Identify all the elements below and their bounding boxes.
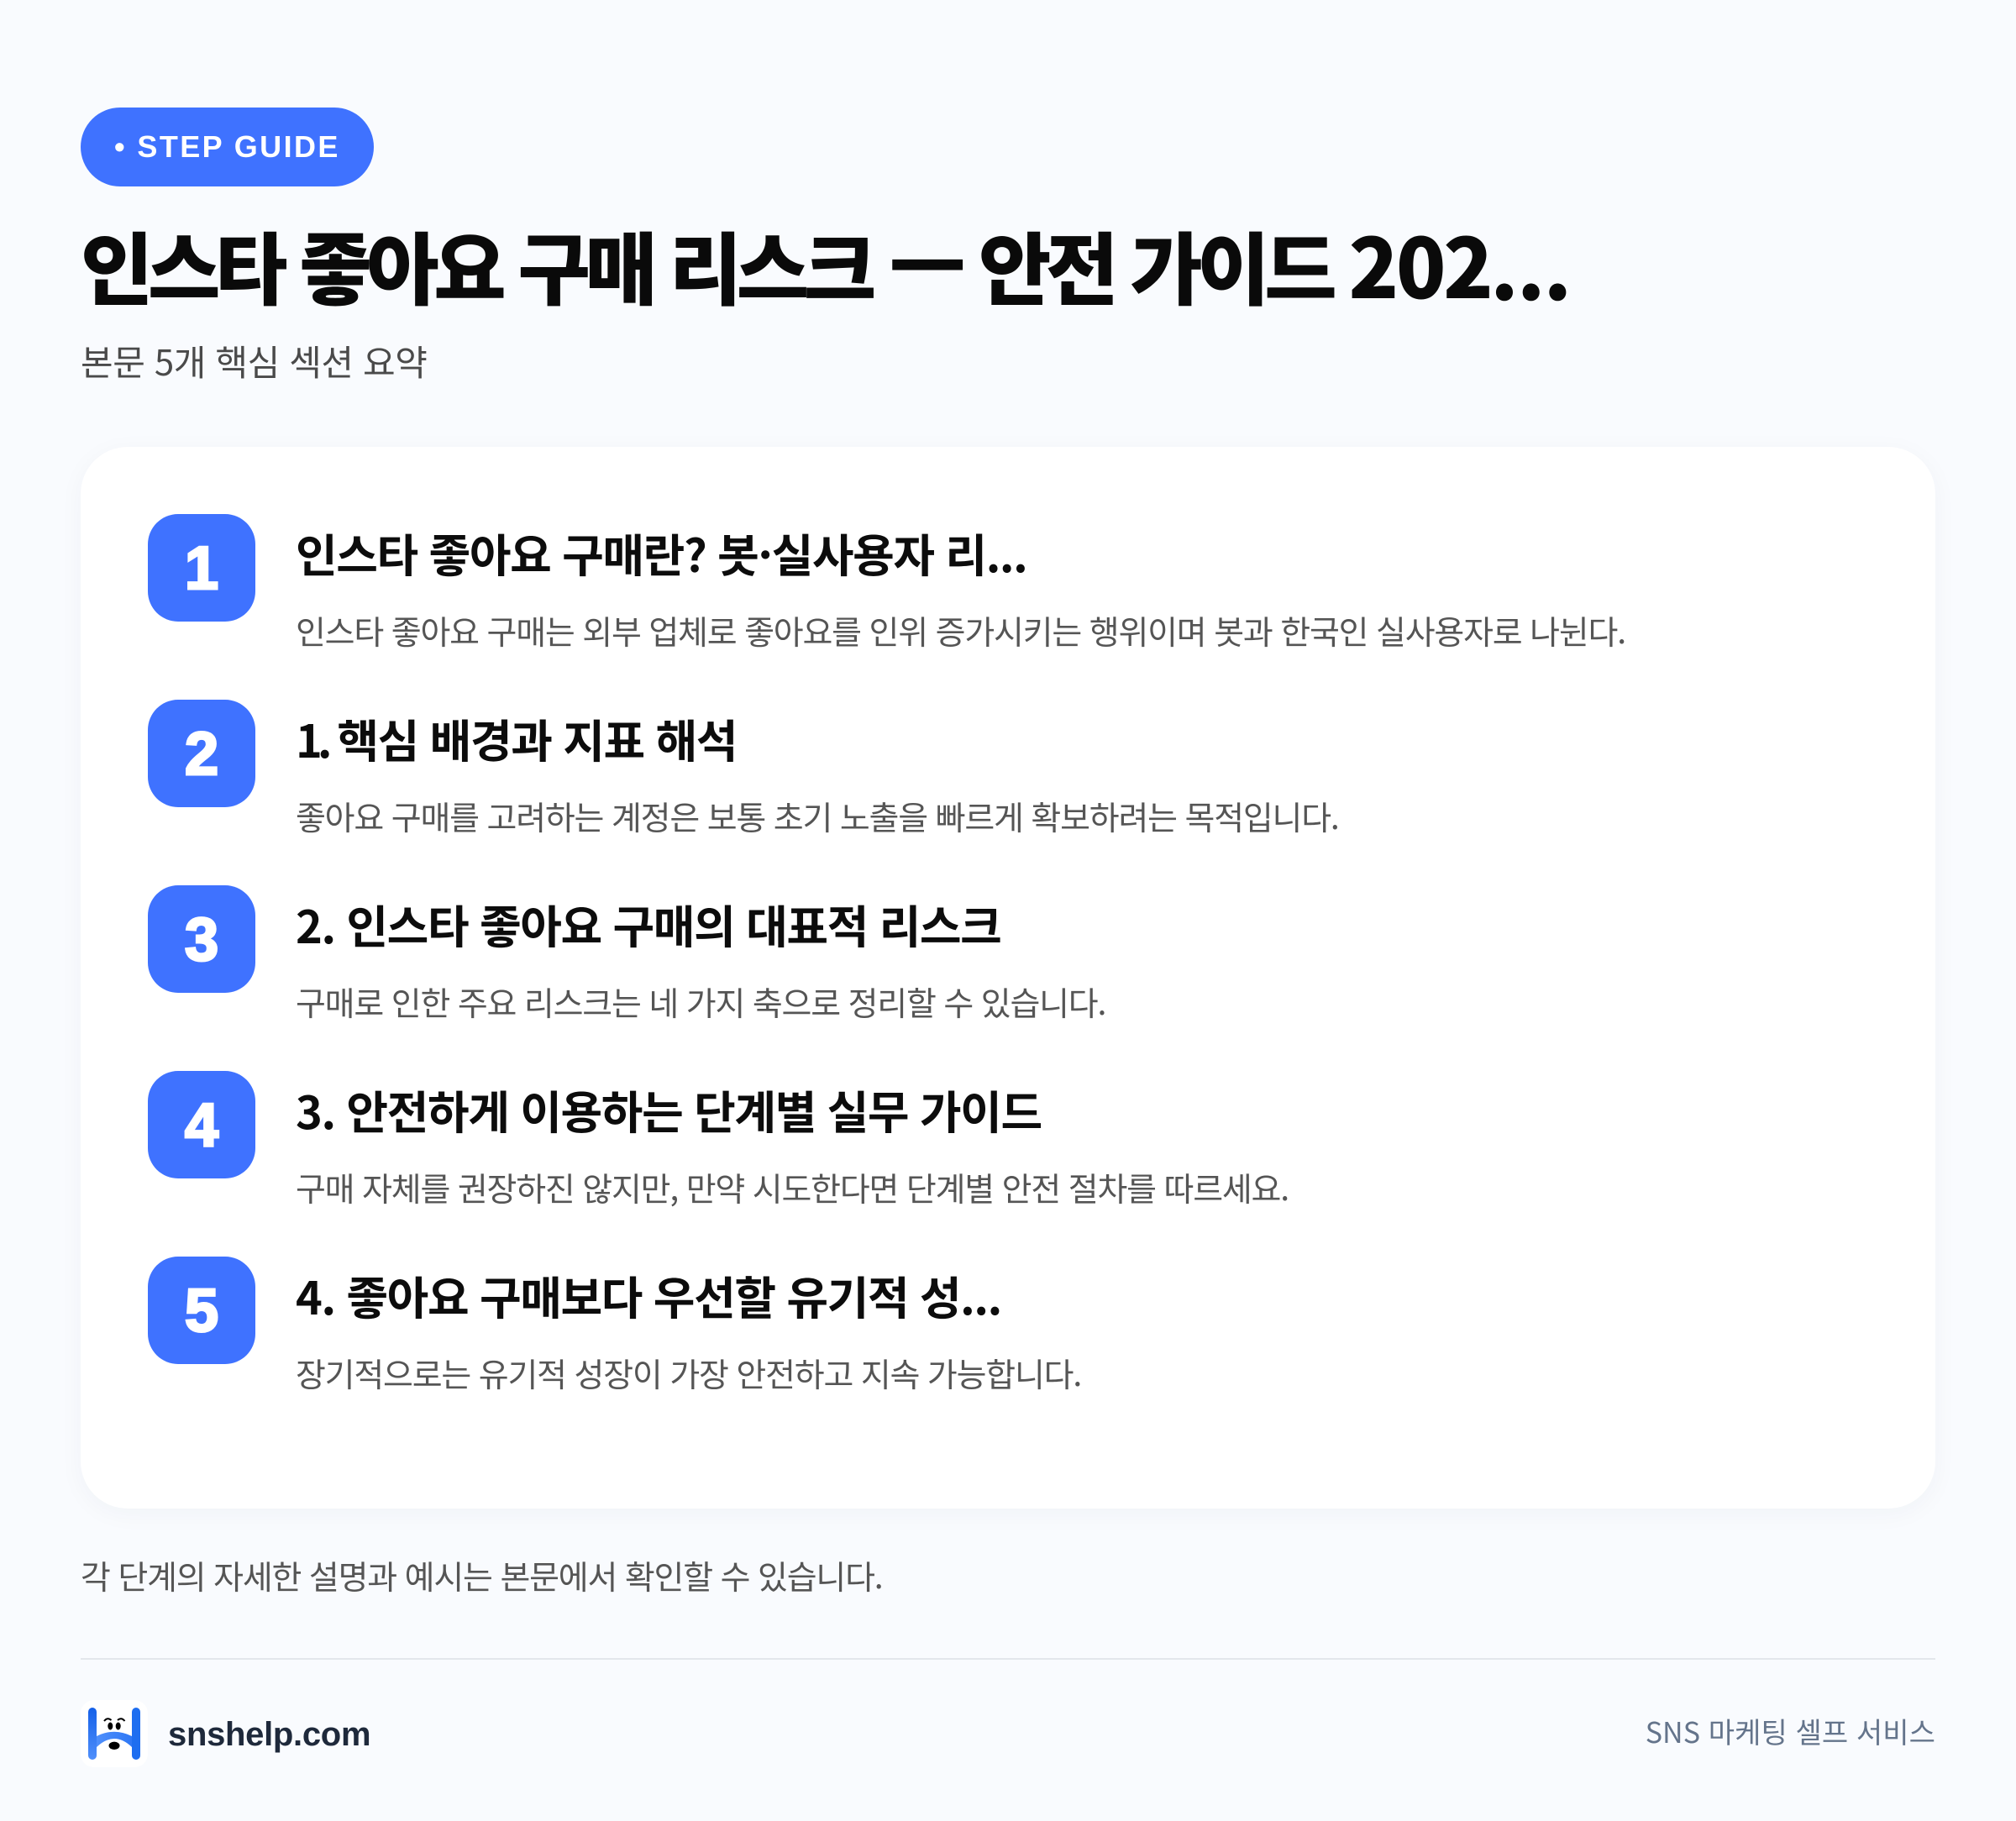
- step 5 heading: 4. 좋아요 구매보다 우선할 유기적 성...: [296, 1262, 1001, 1328]
- step 4: [148, 1071, 1289, 1211]
- number badge 5: 5: [185, 1278, 218, 1345]
- number badge 2: 2: [185, 721, 218, 788]
- title: 인스타 좋아요 구매 리스크 — 안전 가이드 202...: [81, 197, 1570, 324]
- badge: step guide: [81, 108, 374, 186]
- step 4 description: 구매 자체를 권장하진 않지만, 만약 시도한다면 단계별 안전 절차를 따르세요.: [296, 1164, 1289, 1211]
- step 1: [148, 514, 1625, 654]
- number badge 3: [148, 885, 255, 993]
- footnote: 각 단계의 자세한 설명과 예시는 본문에서 확인할 수 있습니다.: [81, 1552, 882, 1599]
- number badge 2: [148, 700, 255, 807]
- step 2 description: 좋아요 구매를 고려하는 계정은 보통 초기 노출을 빠르게 확보하려는 목적입니다.: [296, 793, 1339, 840]
- number badge 5: [148, 1257, 255, 1364]
- number badge 4: 4: [185, 1092, 218, 1159]
- number badge 3: 3: [185, 906, 218, 973]
- step 2 heading: 1. 핵심 배경과 지표 해석: [296, 705, 737, 771]
- badge: step guide: • STEP GUIDE: [114, 129, 340, 164]
- step 3 heading: 2. 인스타 좋아요 구매의 대표적 리스크: [296, 890, 1000, 957]
- step 4 heading: 3. 안전하게 이용하는 단계별 실무 가이드: [296, 1076, 1042, 1142]
- number badge 4: [148, 1071, 255, 1178]
- step 1 description: 인스타 좋아요 구매는 외부 업체로 좋아요를 인위 증가시키는 행위이며 봇과 한국인 실사용자로 나뉜다.: [296, 607, 1625, 654]
- step 3 description: 구매로 인한 주요 리스크는 네 가지 축으로 정리할 수 있습니다.: [296, 979, 1105, 1026]
- tagline: SNS 마케팅 셀프 서비스: [1646, 1710, 1935, 1751]
- icon: snshelp logo: [88, 1708, 140, 1760]
- step 1 heading: 인스타 좋아요 구매란? 봇·실사용자 리...: [296, 519, 1026, 585]
- subtitle: 본문 5개 핵심 섹션 요약: [81, 335, 428, 386]
- brand name: snshelp.com: [168, 1716, 370, 1753]
- step 2: [148, 700, 1339, 840]
- step 5: [148, 1257, 1081, 1397]
- number badge 1: 1: [185, 535, 218, 602]
- panel: steps card: [81, 447, 1935, 1509]
- step 3: [148, 885, 1105, 1026]
- step 5 description: 장기적으로는 유기적 성장이 가장 안전하고 지속 가능합니다.: [296, 1350, 1081, 1397]
- number badge 1: [148, 514, 255, 622]
